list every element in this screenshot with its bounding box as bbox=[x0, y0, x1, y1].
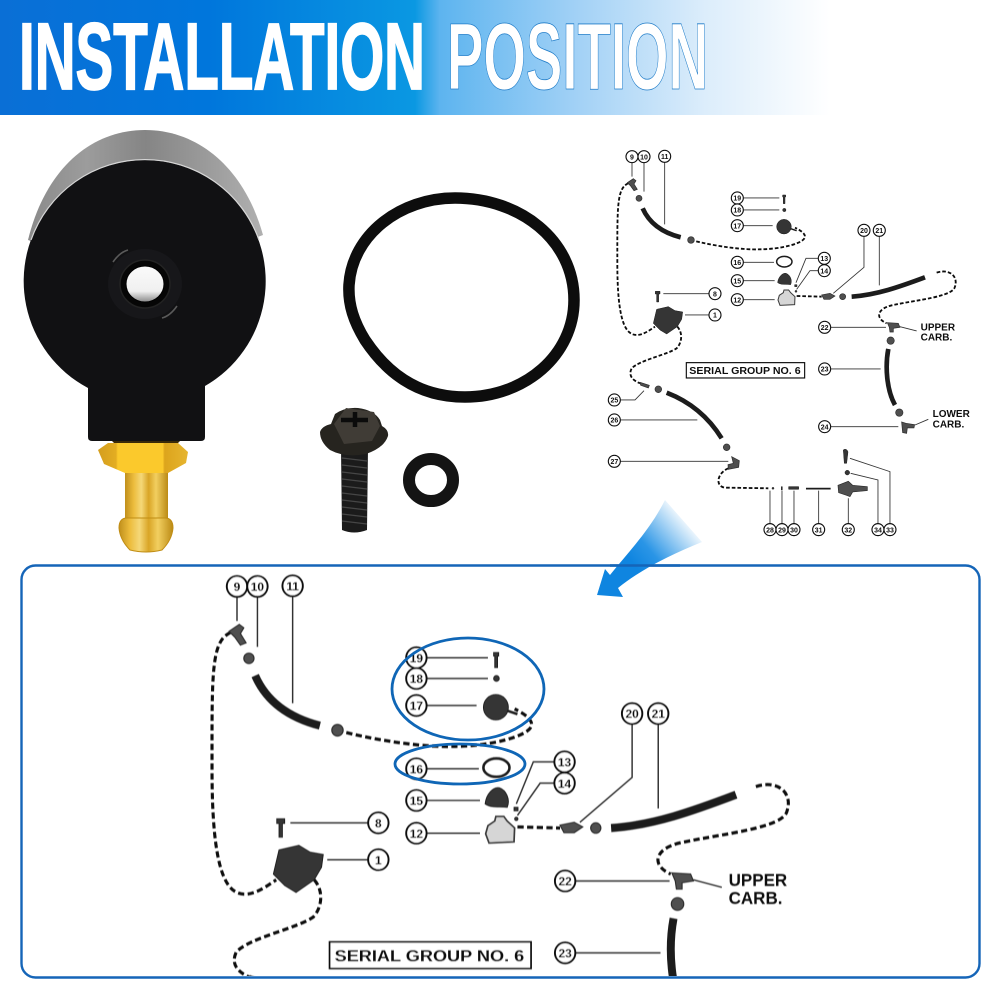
magnified numbered callouts: 16 bbox=[410, 762, 423, 776]
numbered callouts: 28 bbox=[766, 527, 774, 534]
fuel hoses bbox=[643, 208, 925, 438]
numbered callouts: 29 bbox=[778, 527, 786, 534]
numbered callouts: 17 bbox=[733, 223, 741, 230]
numbered callouts: 8 bbox=[713, 291, 717, 298]
numbered callouts: 32 bbox=[844, 527, 852, 534]
numbered callouts: 15 bbox=[733, 278, 741, 285]
numbered callouts: 30 bbox=[790, 527, 798, 534]
magnified numbered callouts: 23 bbox=[558, 946, 572, 961]
product: large o-ring bbox=[349, 198, 574, 397]
panel: magnified diagram bbox=[22, 566, 980, 985]
numbered callouts: 24 bbox=[821, 424, 829, 431]
magnified numbered callouts: 15 bbox=[410, 794, 423, 808]
magnified small parts bbox=[229, 624, 693, 985]
magnified numbered callouts: 10 bbox=[251, 580, 264, 594]
numbered callouts: 26 bbox=[610, 418, 618, 425]
numbered callouts: 19 bbox=[733, 196, 741, 203]
numbered callouts: 21 bbox=[875, 228, 883, 235]
numbered callouts: 20 bbox=[860, 228, 868, 235]
magnified label: upper carb: CARB. bbox=[729, 888, 783, 908]
numbered callouts: 18 bbox=[733, 208, 741, 215]
numbered callouts: 10 bbox=[640, 154, 648, 161]
magnified dashed fuel lines bbox=[212, 632, 788, 978]
panel frame bbox=[22, 566, 980, 978]
magnified leader lines bbox=[237, 596, 722, 953]
numbered callouts: 9 bbox=[630, 154, 634, 161]
magnified numbered callouts: 8 bbox=[375, 816, 382, 830]
magnified numbered callouts: 19 bbox=[410, 651, 423, 665]
label: serial group no. 6 bbox=[686, 363, 805, 378]
numbered callouts: 25 bbox=[610, 398, 618, 405]
numbered callouts: 11 bbox=[661, 154, 668, 161]
numbered callouts: 22 bbox=[821, 325, 829, 332]
highlight ellipse: parts 17 to 19 bbox=[392, 638, 544, 740]
magnified hoses bbox=[255, 676, 736, 985]
label: upper carb: CARB. bbox=[921, 333, 952, 344]
magnified numbered callouts bbox=[227, 575, 668, 963]
title: INSTALLATION bbox=[19, 4, 425, 110]
magnified numbered callouts: 18 bbox=[410, 672, 423, 686]
label: serial group no. 6: SERIAL GROUP NO. 6 bbox=[689, 366, 801, 377]
numbered callouts: 34 bbox=[874, 527, 882, 534]
leader lines bbox=[620, 162, 928, 524]
numbered callouts: 31 bbox=[815, 527, 823, 534]
magnified numbered callouts: 20 bbox=[625, 707, 639, 721]
label: upper carb: UPPER bbox=[921, 322, 955, 333]
numbered callouts: 14 bbox=[820, 268, 828, 275]
magnified numbered callouts: 21 bbox=[652, 707, 665, 721]
numbered callouts: 13 bbox=[820, 256, 828, 263]
magnified numbered callouts: 9 bbox=[234, 580, 241, 594]
small parts bbox=[627, 179, 915, 497]
numbered callouts: 12 bbox=[733, 297, 741, 304]
magnified numbered callouts: 13 bbox=[558, 755, 572, 770]
numbered callouts: 33 bbox=[886, 527, 894, 534]
numbered callouts: 16 bbox=[733, 260, 741, 267]
numbered callouts bbox=[608, 150, 896, 536]
label: lower carb: CARB. bbox=[933, 419, 964, 430]
product: fuel filter housing bbox=[24, 130, 266, 552]
highlight ellipse: part 16 bbox=[395, 744, 525, 784]
product: small o-ring bbox=[409, 459, 453, 501]
magnified numbered callouts: 12 bbox=[410, 827, 423, 841]
magnified label: upper carb: UPPER bbox=[729, 870, 788, 890]
parts diagram: exploded view, upper right bbox=[608, 150, 970, 536]
numbered callouts: 1 bbox=[713, 313, 717, 320]
product: bolt bbox=[320, 408, 388, 532]
magnified numbered callouts: 1 bbox=[375, 853, 382, 867]
magnified label: serial group no. 6: SERIAL GROUP NO. 6 bbox=[335, 946, 524, 966]
dashed fuel lines bbox=[617, 183, 956, 488]
magnified numbered callouts: 11 bbox=[286, 579, 299, 593]
header banner bbox=[0, 0, 830, 115]
numbered callouts: 27 bbox=[610, 459, 618, 466]
label: lower carb: LOWER bbox=[933, 409, 970, 420]
magnified numbered callouts: 14 bbox=[558, 777, 572, 791]
arrow pointing to magnified panel bbox=[597, 500, 702, 597]
title: POSITION bbox=[447, 4, 708, 110]
magnified label: serial group no. 6 bbox=[330, 942, 531, 968]
numbered callouts: 23 bbox=[821, 367, 829, 374]
magnified parts diagram bbox=[212, 575, 788, 985]
magnified numbered callouts: 22 bbox=[558, 875, 572, 889]
magnified numbered callouts: 17 bbox=[410, 699, 423, 713]
